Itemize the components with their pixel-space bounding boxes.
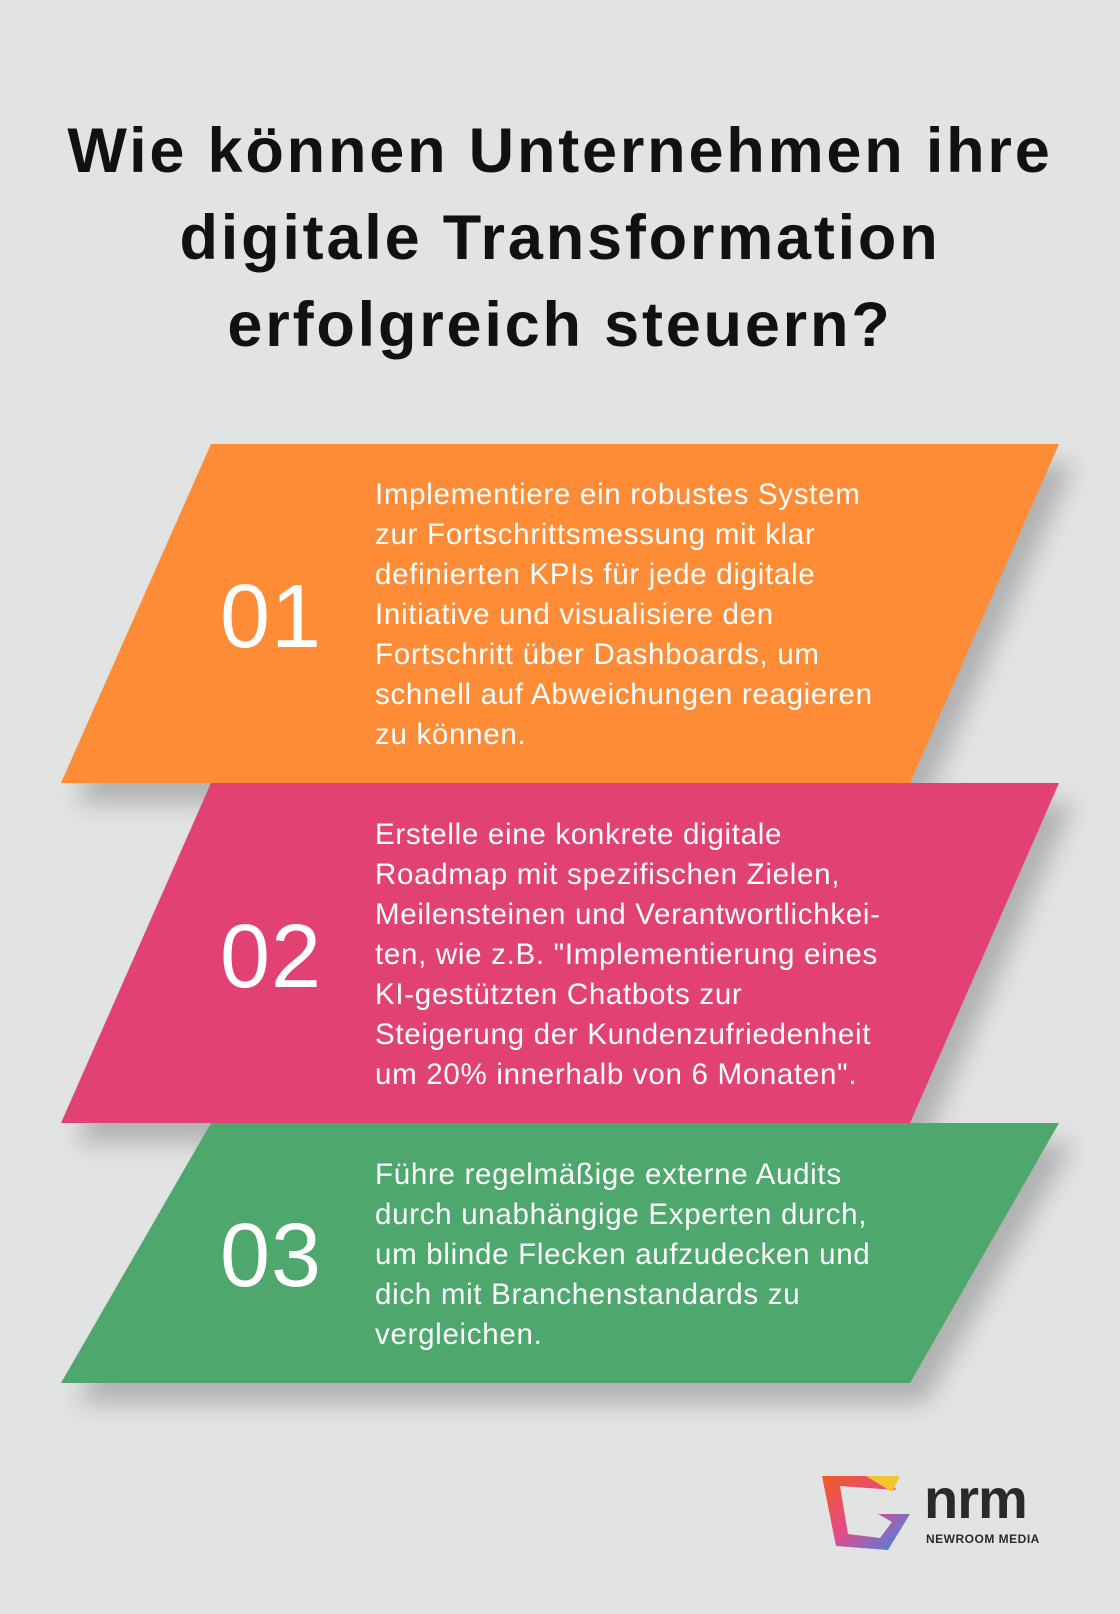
logo xyxy=(822,1467,1040,1550)
logo text: nrm xyxy=(924,1467,1027,1530)
title xyxy=(67,116,1053,360)
panel 2 text xyxy=(375,818,881,1091)
logo: NEWROOM MEDIA xyxy=(926,1532,1040,1546)
title: digitale Transformation xyxy=(180,203,940,273)
panel 1 text: zur Fortschrittsmessung mit klar xyxy=(375,518,815,551)
panel 1 text: schnell auf Abweichungen reagieren xyxy=(375,678,873,711)
panel 2 text: um 20% innerhalb von 6 Monaten". xyxy=(375,1058,857,1091)
panel 1 shape xyxy=(61,444,1059,783)
panel 2 text: Erstelle eine konkrete digitale xyxy=(375,818,782,851)
panel 2 text: KI-gestützten Chatbots zur xyxy=(375,978,742,1011)
panel 3 text: Führe regelmäßige externe Audits xyxy=(375,1158,842,1191)
panel 2 shape xyxy=(61,783,1059,1123)
panel 2 text: Steigerung der Kundenzufriedenheit xyxy=(375,1018,871,1051)
panel 3 number: 03 xyxy=(220,1206,322,1306)
panel 2 text: Roadmap mit spezifischen Zielen, xyxy=(375,858,840,891)
panel 3 text: vergleichen. xyxy=(375,1318,542,1351)
panel 1 text: definierten KPIs für jede digitale xyxy=(375,558,815,591)
panel 1 text: Implementiere ein robustes System xyxy=(375,478,860,511)
panel 3 text xyxy=(375,1158,870,1351)
panel 2 number: 02 xyxy=(220,907,322,1007)
title: Wie können Unternehmen ihre xyxy=(67,116,1053,186)
panel 3 text: um blinde Flecken aufzudecken und xyxy=(375,1238,870,1271)
icon: logo mark xyxy=(822,1476,910,1550)
panel 1 number: 01 xyxy=(220,567,322,667)
panel 1 text: zu können. xyxy=(375,718,526,751)
panel 1 text: Fortschritt über Dashboards, um xyxy=(375,638,820,671)
panel 3 text: dich mit Branchenstandards zu xyxy=(375,1278,800,1311)
panel 2 text: ten, wie z.B. "Implementierung eines xyxy=(375,938,878,971)
title: erfolgreich steuern? xyxy=(227,290,893,360)
panel 3 text: durch unabhängige Experten durch, xyxy=(375,1198,867,1231)
panel 3 shape xyxy=(61,1123,1059,1383)
panel 2 text: Meilensteinen und Verantwortlichkei- xyxy=(375,898,881,931)
panel 1 text xyxy=(375,478,873,751)
panel 1 text: Initiative und visualisiere den xyxy=(375,598,774,631)
